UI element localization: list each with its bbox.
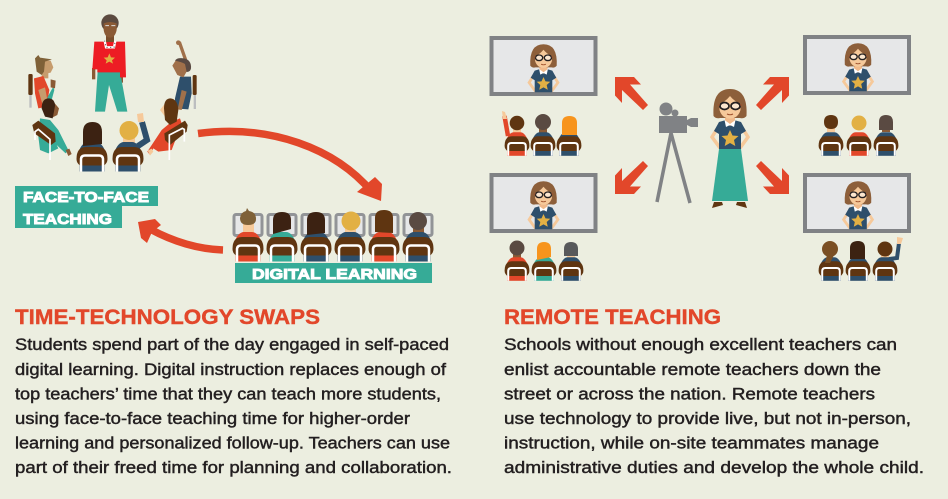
text: remote teaching body: street or across the nation. Remote teachers [504, 386, 875, 404]
students: bottom right group [819, 237, 903, 281]
text: remote teaching body: instruction, while on-site teammates manage [504, 434, 879, 452]
student in red shirt, right [147, 98, 188, 160]
label: face-to-face teaching: TEACHING [23, 212, 112, 228]
heading: remote teaching: REMOTE TEACHING [504, 306, 721, 329]
student with raised hand, right [172, 40, 197, 110]
text: remote teaching body: administrative duties and develop the whole child. [504, 459, 924, 477]
arrow: down right [756, 161, 789, 194]
digital learning row: students at computers [232, 208, 434, 262]
text: time-technology swaps body: top teachers’ time that they can teach more students, [15, 386, 441, 404]
student in red shirt, left [28, 55, 56, 108]
screen: bottom left [492, 175, 596, 231]
teacher in red shirt [92, 14, 127, 112]
text: time-technology swaps body: digital learning. Digital instruction replaces enough of [15, 361, 446, 379]
text: remote teaching body: Schools without enough excellent teachers can [504, 336, 897, 354]
teacher: presenter with teal skirt [712, 89, 748, 208]
screen: top left [492, 38, 596, 94]
arrow: down left [615, 161, 648, 194]
students: bottom left group [505, 240, 583, 281]
students: top right group [819, 115, 898, 156]
arrow: face-to-face to digital [198, 131, 382, 201]
arrow: up right [756, 77, 789, 110]
label: face-to-face teaching: FACE-TO-FACE [23, 190, 149, 206]
arrow: digital to face-to-face [138, 219, 223, 250]
student in teal shirt, left [32, 98, 72, 160]
arrow: up left [615, 77, 648, 110]
text: remote teaching body: use technology to provide live, but not in-person, [504, 410, 911, 428]
label: face-to-face teaching [15, 186, 158, 228]
text: time-technology swaps body: part of their freed time for planning and collaboration. [15, 459, 452, 477]
screen: top right [805, 37, 909, 93]
label: digital learning [235, 263, 432, 283]
icon: video camera on tripod [657, 102, 698, 203]
text: remote teaching body [504, 336, 924, 477]
text: time-technology swaps body: Students spend part of the day engaged in self-paced [15, 336, 449, 354]
heading: time-technology swaps: TIME-TECHNOLOGY SWAPS [15, 306, 320, 329]
text: time-technology swaps body [15, 336, 452, 477]
screen: bottom right [805, 175, 909, 231]
text: remote teaching body: enlist accountable remote teachers down the [504, 361, 881, 379]
text: time-technology swaps body: learning and personalized follow-up. Teachers can use [15, 434, 450, 452]
label: digital learning: DIGITAL LEARNING [252, 267, 417, 283]
illustration: teacher and students in a circle [28, 14, 197, 160]
students seen from behind, bottom of the circle [76, 113, 147, 172]
students: top left group [502, 111, 581, 156]
text: time-technology swaps body: using face-to-face teaching time for higher-order [15, 410, 411, 428]
